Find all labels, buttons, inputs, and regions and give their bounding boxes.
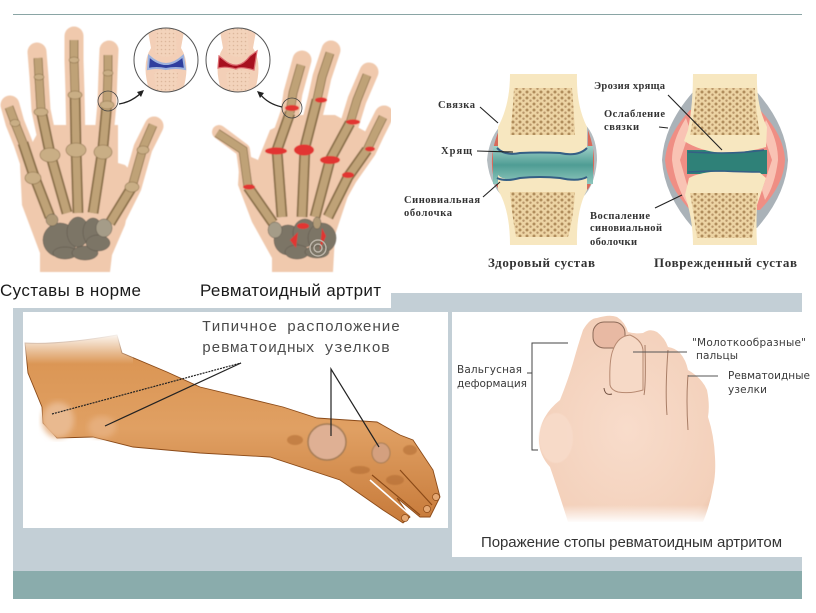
panel: hands comparison [0,0,391,308]
watermark spiral [310,240,326,256]
icon: healthy joint lens [134,26,198,96]
joint labels: оболочка [404,208,453,219]
foot labels: узелки [728,384,767,396]
top rule [13,14,802,15]
arthritic hand [217,50,384,272]
nodule leader lines [52,363,379,447]
wrist nodule [308,424,346,460]
knuckle nodule [372,443,390,463]
bracket [527,343,568,450]
joint labels: оболочки [590,237,637,248]
bottom teal band [13,571,802,599]
healthy joint [487,74,597,245]
foot labels: Вальгусная [457,364,522,376]
joint labels: Эрозия хряща [594,81,666,92]
forearm nodule [88,416,116,438]
joint labels: Синовиальная [404,195,480,206]
panel: foot [452,312,810,557]
caption: damaged joint: Поврежденный сустав [654,255,797,270]
big toenail [593,322,625,348]
caption: rheumatoid arthritis: Ревматоидный артрит [200,281,381,300]
arrow: healthy joint callout [98,90,144,111]
healthy hand [9,36,154,272]
foot labels [457,337,810,396]
arm illustration [23,332,440,523]
icon: arthritic joint lens [206,26,270,96]
foot leader lines [633,352,718,376]
joint labels [404,81,666,248]
elbow nodule [42,402,74,438]
joint labels: синовиальной [590,223,662,234]
damaged joint [662,74,788,245]
joint labels: связки [604,122,639,133]
toe creases [604,345,688,430]
arm heading [202,319,400,357]
arthritic joint inflammation marks [243,97,375,250]
joint labels: Ослабление [604,109,665,120]
caption: foot: Поражение стопы ревматоидным артритом [481,534,782,551]
arm heading: ревматоидных узелков [202,340,390,357]
foot labels: Ревматоидные [728,370,810,382]
bunion [539,413,573,463]
arm heading: Типичное расположение [202,319,400,336]
caption: normal joints: Суставы в норме [0,281,141,300]
foot labels: "Молоткообразные" [692,337,806,349]
caption: healthy joint: Здоровый сустав [488,255,595,270]
joint labels: Воспаление [590,211,650,222]
joint leader lines [477,95,722,208]
foot labels: пальцы [696,350,738,362]
hand blotches [287,435,417,485]
joint labels: Хрящ [441,146,472,157]
hammer toe [610,335,643,393]
joint labels: Связка [438,100,476,111]
panel: joint comparison [391,15,802,293]
foot labels: деформация [457,378,527,390]
arrow: arthritic joint callout [257,91,302,118]
panel: arm with nodules [23,312,448,528]
foot illustration [527,316,718,523]
